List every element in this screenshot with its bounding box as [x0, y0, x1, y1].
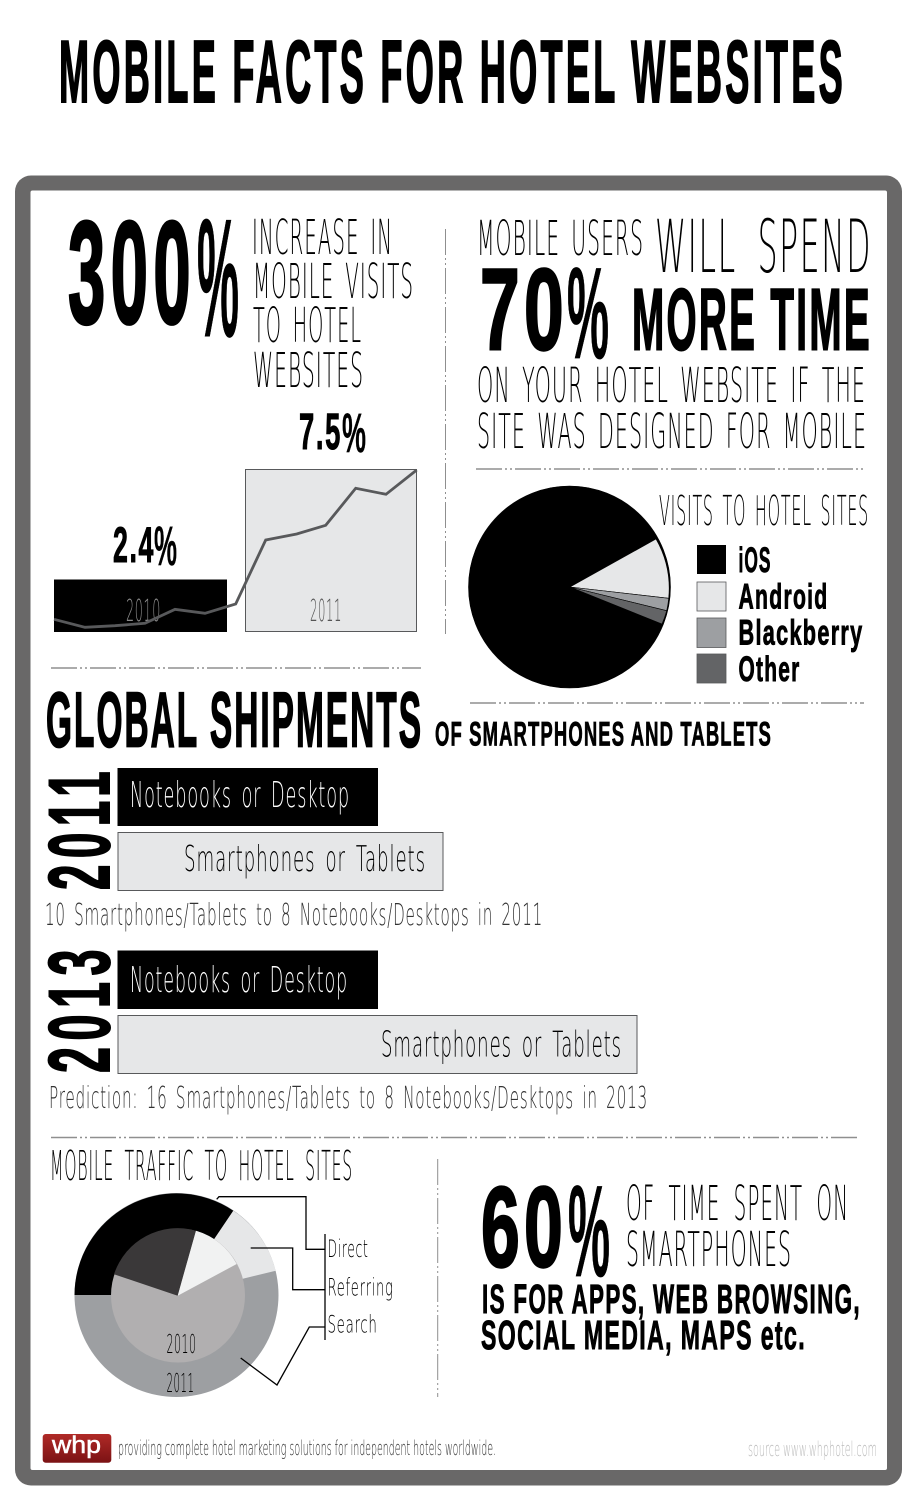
outer ring 2011	[74, 1193, 278, 1397]
stat: 70% more time: 70	[480, 244, 568, 374]
donut chart: mobile traffic: 2010	[166, 1330, 196, 1360]
heading: global shipments: GLOBAL SHIPMENTS	[46, 676, 423, 764]
value: 2.4%: 2.4	[113, 517, 155, 573]
traffic labels: Referring	[328, 1274, 394, 1302]
legend: Android: Android	[738, 578, 828, 616]
bar chart: 2010 vs 2011 mobile visits	[54, 401, 417, 632]
bar chart: 2010 vs 2011 mobile visits: 2011	[310, 594, 342, 629]
text: of time spent on smartphones	[626, 1176, 849, 1278]
value: 7.5%: 7.5	[299, 403, 342, 460]
leader lines	[217, 1197, 325, 1385]
logo: whp	[43, 1432, 111, 1463]
bar: smartphones 2013	[118, 1016, 637, 1074]
text: increase in mobile visits	[252, 210, 414, 399]
bar: notebooks 2013	[118, 950, 378, 1009]
text: increase in mobile visits: TO HOTEL	[253, 298, 362, 354]
legend: Android	[697, 578, 828, 616]
label: smartphones: Smartphones or Tablets	[184, 839, 426, 880]
text: on your hotel website	[477, 358, 867, 460]
text: is for apps	[481, 1276, 861, 1358]
donut chart: mobile traffic	[74, 1193, 278, 1399]
text: MOBILE VISITS	[253, 254, 414, 310]
chart: shipments 2011: Notebooks or Desktop	[130, 775, 350, 816]
text: increase in mobile visits: WEBSITES	[253, 343, 364, 399]
bar: notebooks 2011	[118, 768, 378, 826]
legend: iOS	[697, 541, 772, 580]
stat: 300% increase	[68, 184, 239, 372]
bar chart: 2010 vs 2011 mobile visits: %	[154, 514, 177, 577]
legend: Other	[697, 650, 800, 689]
text: mobile users will spend	[477, 205, 872, 290]
traffic labels: Direct	[328, 1235, 368, 1263]
pie chart: visits to hotel sites	[468, 486, 670, 688]
bar: 2010	[54, 580, 227, 632]
legend	[697, 541, 864, 689]
text: INCREASE IN	[252, 210, 393, 266]
bar: smartphones 2011	[118, 832, 443, 890]
chart: shipments 2011	[32, 765, 543, 933]
legend: Blackberry	[697, 614, 864, 652]
trend line	[54, 470, 417, 627]
text: %	[568, 1158, 610, 1304]
year: 2013: 2013	[32, 943, 128, 1073]
stat: 70% more time	[480, 240, 872, 386]
stat: 60%: 60	[481, 1164, 567, 1292]
text: %	[197, 184, 239, 372]
traffic labels: Search	[328, 1310, 378, 1338]
chart: shipments 2013	[32, 943, 648, 1116]
bar: 2011	[246, 470, 416, 632]
chart: shipments 2013: Notebooks or Desktop	[130, 960, 348, 1001]
stat: 300% increase: 300	[68, 191, 196, 354]
text: MOBILE TRAFFIC TO HOTEL SITES	[50, 1142, 353, 1190]
text: mobile users will spend: MOBILE USERS	[477, 211, 644, 267]
legend: Other: Other	[738, 650, 800, 689]
label: smartphones: Smartphones or Tablets	[381, 1024, 622, 1066]
bar chart: 2010 vs 2011 mobile visits: 2010	[126, 594, 161, 629]
inner pie 2010	[111, 1228, 245, 1362]
bar chart: 2010 vs 2011 mobile visits: %	[342, 401, 366, 464]
legend: iOS	[738, 541, 772, 580]
traffic labels	[328, 1235, 394, 1338]
logo: whp: whp	[51, 1432, 101, 1459]
donut chart: mobile traffic: 2011	[166, 1369, 194, 1399]
stat: 70% more time: %	[567, 240, 609, 386]
text: providing complete hotel marketing solutions for independent hotels worldwide.	[118, 1436, 496, 1460]
divider dashes	[51, 229, 864, 1397]
year: 2011: 2011	[32, 765, 128, 890]
